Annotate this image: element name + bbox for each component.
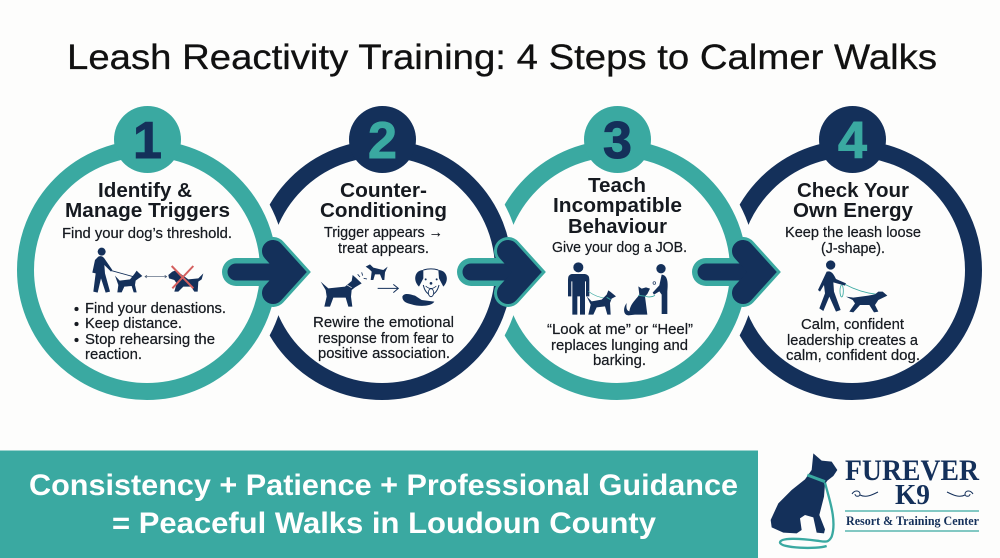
number badge 1 [114, 106, 181, 173]
subheading: step 2: Trigger appears → [324, 224, 443, 241]
bullet list: step 1: Stop rehearsing the [85, 331, 215, 348]
heading: step 2: Conditioning [320, 200, 447, 222]
number badge 4 [819, 106, 886, 173]
number badge 3 [584, 106, 651, 173]
heading: step 4 [793, 180, 914, 222]
panel: step 1 [62, 106, 232, 363]
number badge 2 [349, 106, 416, 173]
bullet list: step 1: reaction. [85, 346, 142, 363]
heading: step 1: Manage Triggers [65, 200, 230, 222]
heading: step 4: Own Energy [793, 200, 914, 222]
logo wordmark: FUREVER [845, 454, 979, 487]
heading: step 1 [65, 180, 230, 222]
subheading: step 2 [324, 224, 443, 257]
arrow: step 2 to 3 [471, 251, 527, 293]
body text: step 3 [547, 321, 693, 369]
number badge 1: 1 [133, 112, 162, 170]
icon: walker and dog at a distance from another dog [92, 248, 203, 293]
logo tagline: Resort & Training Center [846, 513, 979, 528]
bullet list: step 1 [74, 300, 226, 363]
subheading: step 2: treat appears. [338, 240, 429, 257]
logo: Furever K9 [771, 453, 979, 548]
subheading: step 3: Give your dog a JOB. [552, 239, 687, 256]
body text: step 2: positive association. [318, 345, 450, 362]
number badge 2: 2 [368, 112, 397, 170]
number badge 4: 4 [838, 112, 867, 170]
body text: step 4: leadership creates a [787, 332, 919, 349]
subheading: step 4: (J-shape). [821, 240, 885, 257]
heading: step 3 [553, 175, 682, 238]
body text: step 2 [313, 314, 454, 362]
icon: calm walker with loose leash and dog [818, 260, 887, 312]
panel: step 3 [547, 106, 693, 369]
heading: step 2: Counter- [340, 180, 427, 202]
ring: step 2 [260, 148, 504, 392]
bullet list: step 1: Find your denastions. [85, 300, 226, 317]
banner message [29, 469, 738, 540]
body text: step 2: Rewire the emotional [313, 314, 454, 331]
body text: step 2: response from fear to [318, 330, 454, 347]
icon: dog sees trigger then receives treat [321, 264, 447, 307]
heading: step 1: Identify & [98, 180, 192, 202]
panel: step 2 [313, 106, 454, 362]
body text: step 4 [786, 316, 920, 364]
title: Leash Reactivity Training: 4 Steps to Calmer Walks [67, 38, 937, 77]
icon: owner with heeling dog and sitting dog [568, 262, 668, 315]
body text: step 4: Calm, confident [801, 316, 905, 333]
footer banner [0, 450, 758, 558]
arrow: step 3 to 4 [706, 251, 762, 293]
heading: step 3: Behaviour [568, 216, 667, 238]
ring: step 4 [730, 148, 974, 392]
body text: step 3: barking. [593, 352, 646, 369]
subheading: step 4 [785, 224, 921, 257]
panel: step 4 [785, 106, 921, 364]
number badge 3: 3 [603, 112, 632, 170]
bullet list: step 1: Keep distance. [85, 315, 182, 332]
ring: step 3 [496, 148, 738, 392]
body text: step 3: replaces lunging and [551, 337, 688, 354]
body text: step 4: calm, confident dog. [786, 347, 920, 364]
logo: Furever K9: K9 [895, 479, 930, 511]
arrow: step 1 to 2 [236, 251, 292, 293]
banner message: Consistency + Patience + Professional Guidance [29, 469, 738, 502]
heading: step 4: Check Your [797, 180, 909, 202]
subheading: step 4: Keep the leash loose [785, 224, 921, 241]
subheading: step 1: Find your dog’s threshold. [62, 225, 232, 242]
heading: step 2 [320, 180, 447, 222]
heading: step 3: Teach [588, 175, 646, 197]
heading: step 3: Incompatible [553, 195, 682, 217]
icon: sitting dog with teal leash [771, 453, 837, 548]
ring: step 1 [26, 148, 268, 392]
body text: step 3: “Look at me” or “Heel” [547, 321, 693, 338]
banner message: = Peaceful Walks in Loudoun County [112, 507, 656, 540]
